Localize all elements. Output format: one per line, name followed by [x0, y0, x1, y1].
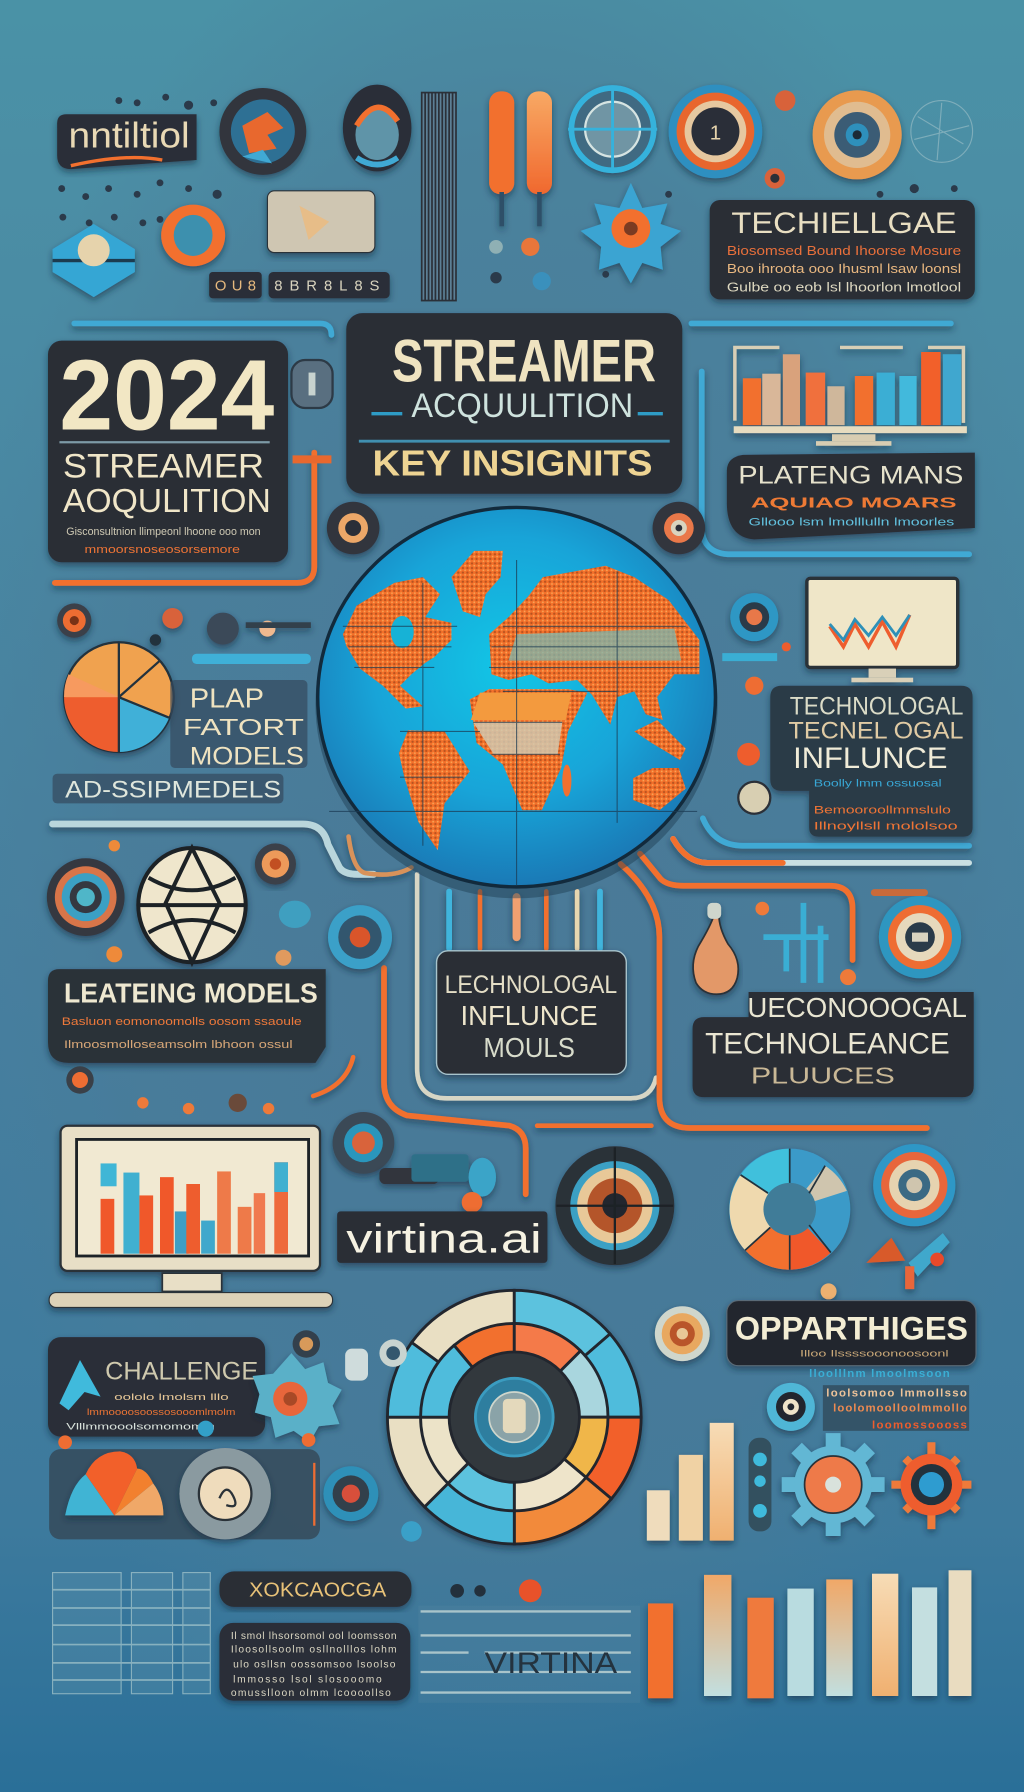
- map bands: [471, 629, 681, 754]
- icon: orange dial: 1: [710, 121, 721, 144]
- panel: Lechnological Influence Mouls: INFLUNCE: [461, 1000, 598, 1031]
- panel: 2024 Streamer Acquisition: AOQULITION: [63, 483, 271, 520]
- panel: Technological Influence: TECHNOLOGAL: [790, 692, 963, 720]
- small badges: [209, 272, 390, 298]
- badge: Virtina.ai: [337, 1211, 547, 1263]
- panel: Opportunities: OPPARTHIGES: [735, 1310, 968, 1346]
- icon: ring near opportunities: [655, 1306, 710, 1361]
- icon: ring bottom-left group: [66, 1066, 274, 1114]
- blue blob and dots: [106, 840, 311, 966]
- icon: spiral ring: [873, 1144, 955, 1226]
- panel: Opportunities: [727, 1301, 976, 1366]
- icon: eye ring: [767, 1383, 815, 1431]
- text lines: opportunities: [809, 1368, 969, 1432]
- panel: Technoleance Pluuces: TECHNOLEANCE: [705, 1028, 950, 1061]
- panel: Technological Influence: [770, 686, 973, 837]
- icon: blue gear: [782, 1433, 885, 1536]
- panel: TECHIELLGAE: Gulbe oo eob lsl lhoorlon lmotlool: [727, 280, 961, 294]
- panel: Technological Influence: Bemooroollmmslulo: [814, 805, 951, 817]
- badge: Virtina.ai: virtina.ai: [346, 1216, 542, 1262]
- heading: 2024: 2024: [59, 340, 274, 452]
- text panel: Iloosollsoolm osllnolllos lohm: [231, 1645, 397, 1656]
- continents: [343, 551, 699, 850]
- top badge: nntiltiol: [57, 114, 197, 169]
- barcode: [422, 93, 456, 301]
- panel: TECHIELLGAE: [710, 200, 975, 299]
- panel: center title: KEY INSIGNITS: [373, 442, 653, 483]
- panel: Technological Influence: INFLUNCE: [793, 742, 947, 775]
- donut chart: [729, 1149, 850, 1270]
- panel: Challenge: lmmoooosoossosooomlmolm: [87, 1407, 235, 1417]
- text lines: opportunities: loolsomoo lmmollsso: [826, 1388, 967, 1400]
- panel: Plateng Mans: Gllooo lsm lmolllulln lmoorles: [749, 517, 955, 529]
- panel: 2024 Streamer Acquisition: mmoorsnoseosorsemore: [85, 544, 240, 556]
- gear with coil: [179, 1448, 271, 1539]
- panel: Technological Influence: Boolly lmm ossuosal: [814, 778, 942, 789]
- orange pills: [489, 91, 552, 226]
- panel: Technological Influence: TECNEL OGAL: [789, 717, 963, 744]
- data table: [53, 1573, 210, 1694]
- panel: Technological Influence: Illnoyllsll mololsoo: [814, 821, 958, 833]
- panel: center title: [346, 313, 682, 494]
- panel: TECHIELLGAE: Boo ihroota ooo Ihusml lsaw loonsl: [727, 262, 961, 276]
- panel: Leateing Models: [48, 969, 326, 1063]
- icon: plug left: [291, 360, 333, 459]
- panel: Leateing Models: Ilmoosmolloseamsolm lbhoon ossul: [64, 1039, 293, 1051]
- small orange and tool marks: [722, 642, 791, 814]
- icon: ring right of globe: [730, 593, 778, 641]
- panel: lower left with fan chart and gear: [49, 1448, 320, 1539]
- panel: Plap Fatort Models: PLAP: [190, 682, 264, 713]
- vertical pill: [749, 1438, 771, 1531]
- panel: TECHIELLGAE: Biosomsed Bound Ihoorse Mosure: [727, 244, 961, 258]
- panel: Technoleance Pluuces: [693, 992, 974, 1097]
- icon: gear dial right: [879, 896, 961, 978]
- small ornaments centre top: [489, 168, 785, 290]
- panel: Lechnological Influence Mouls: LECHNOLOGAL: [445, 971, 617, 999]
- text panel: Il smol lhsorsomol ool loomsson: [231, 1631, 397, 1642]
- icon: light bulb: [693, 903, 738, 994]
- bar chart monitor: [734, 347, 967, 446]
- pie chart: [64, 642, 174, 752]
- panel: TECHIELLGAE: TECHIELLGAE: [731, 207, 957, 240]
- panel: center title: ACQUULITION: [411, 387, 633, 425]
- icon: large dial: [555, 1146, 674, 1265]
- panel: Challenge: Vlllmmooolsomomomm: [66, 1422, 215, 1432]
- top badge: nntiltiol: nntiltiol: [69, 114, 190, 155]
- monitor: wave chart: [807, 578, 958, 682]
- text panel: [219, 1623, 410, 1701]
- panel: 2024 Streamer Acquisition: STREAMER: [63, 448, 264, 486]
- text panel: ulo osllsn oossomsoo lsoolso: [233, 1659, 396, 1670]
- icon: ring beside title right: [653, 502, 705, 554]
- fan chart: [65, 1451, 163, 1515]
- small badges: 8BR8L8S: [274, 278, 380, 294]
- panel: center title: STREAMER: [392, 327, 656, 395]
- icon: ring lower: [323, 1466, 378, 1521]
- panel: Plap Fatort Models: FATORT: [183, 714, 304, 740]
- panel: Challenge: oololo lmolsm lllo: [114, 1392, 229, 1402]
- panel: Plap Fatort Models: MODELS: [190, 743, 304, 771]
- icon: orange target: [813, 90, 902, 179]
- icon: orange dial: [669, 85, 762, 178]
- small badges: O U 8: [215, 278, 256, 294]
- play card: [267, 191, 375, 253]
- icon: crossed tools: [821, 1233, 950, 1299]
- icon: blue crosshair ring: [568, 87, 657, 173]
- text panel: omusslloon olmm lcoooollso: [231, 1688, 391, 1699]
- icon: line globe: [138, 848, 246, 962]
- icon: network: [911, 101, 973, 162]
- icons left of globe row: [57, 603, 311, 646]
- icon: blue ring: [328, 905, 392, 969]
- text panel: lmmosso lsol slosooomo: [233, 1674, 382, 1685]
- panel: Technoleance Pluuces: PLUUCES: [751, 1062, 895, 1088]
- panel: Plateng Mans: [727, 453, 975, 539]
- panel: 2024 Streamer Acquisition: [48, 340, 288, 562]
- segmented wheel: [387, 1290, 641, 1544]
- panel: Plateng Mans: PLATENG MANS: [738, 461, 963, 489]
- icon: blue pipes: [755, 902, 856, 985]
- icon: concentric rings left: [47, 858, 125, 936]
- label: Ad-supported models: AD-SSIPMEDELS: [65, 777, 281, 804]
- badge: Xokcaocga: [219, 1571, 411, 1607]
- icon: top gear: [219, 88, 306, 175]
- icon: orange gear: [891, 1442, 971, 1529]
- panel: Lechnological Influence Mouls: MOULS: [483, 1032, 575, 1063]
- panel: Plateng Mans: AQUIAO MOARS: [751, 495, 957, 511]
- text lines: opportunities: lloolllnm lmoolmsoon: [809, 1368, 950, 1380]
- blue pill: [192, 654, 311, 664]
- icon: small ring at top right of globe icon: [255, 843, 296, 885]
- panel: Virtina lines: VIRTINA: [485, 1647, 617, 1680]
- icon: blue hexagon: [53, 224, 135, 297]
- text lines: opportunities: loomossoooss: [872, 1420, 967, 1432]
- small dots top: [58, 94, 958, 283]
- panel: Plap Fatort Models: [170, 680, 307, 771]
- panel: Challenge: CHALLENGE: [105, 1357, 258, 1385]
- globe: [315, 507, 718, 898]
- icon: star badge: [581, 183, 681, 283]
- icon: flower gear: [253, 1353, 342, 1442]
- panel: Opportunities: Illoo Ilssssooonoosoonl: [800, 1349, 949, 1359]
- badge: Xokcaocga: XOKCAOCGA: [249, 1579, 387, 1602]
- bar chart: bottom: [648, 1570, 971, 1698]
- text lines: opportunities: loolomoolloolmmollo: [833, 1402, 967, 1414]
- dots lower left: [58, 1421, 422, 1542]
- icon: ring by challenge: [293, 1330, 407, 1381]
- icon: small orange dot: [775, 90, 795, 111]
- bar chart: three bars: [647, 1423, 734, 1541]
- panel: Leateing Models: LEATEING MODELS: [64, 977, 318, 1008]
- icon: ring near monitor: [333, 1112, 394, 1174]
- panel: 2024 Streamer Acquisition: Gisconsultnion llimpeonl lhoone ooo mon: [66, 526, 261, 538]
- panel: Lechnological Influence Mouls: [437, 951, 626, 1074]
- short orange bar: [871, 889, 928, 896]
- panel: Challenge: [48, 1337, 265, 1437]
- connector lines: [53, 323, 969, 1194]
- panel: Technoleance Pluuces: UECONOOOGAL: [747, 992, 967, 1023]
- icon: top arc dial: [343, 85, 411, 171]
- icon: tool: [379, 1154, 496, 1213]
- icon: ring beside title left: [327, 502, 379, 554]
- panel: Leateing Models: Basluon eomonoomolls oosom ssaoule: [62, 1016, 302, 1028]
- icon: orange ring: [161, 205, 225, 266]
- monitor with bar chart: [49, 1126, 333, 1307]
- grid lines: [329, 560, 699, 886]
- panel: Virtina lines: [418, 1579, 640, 1703]
